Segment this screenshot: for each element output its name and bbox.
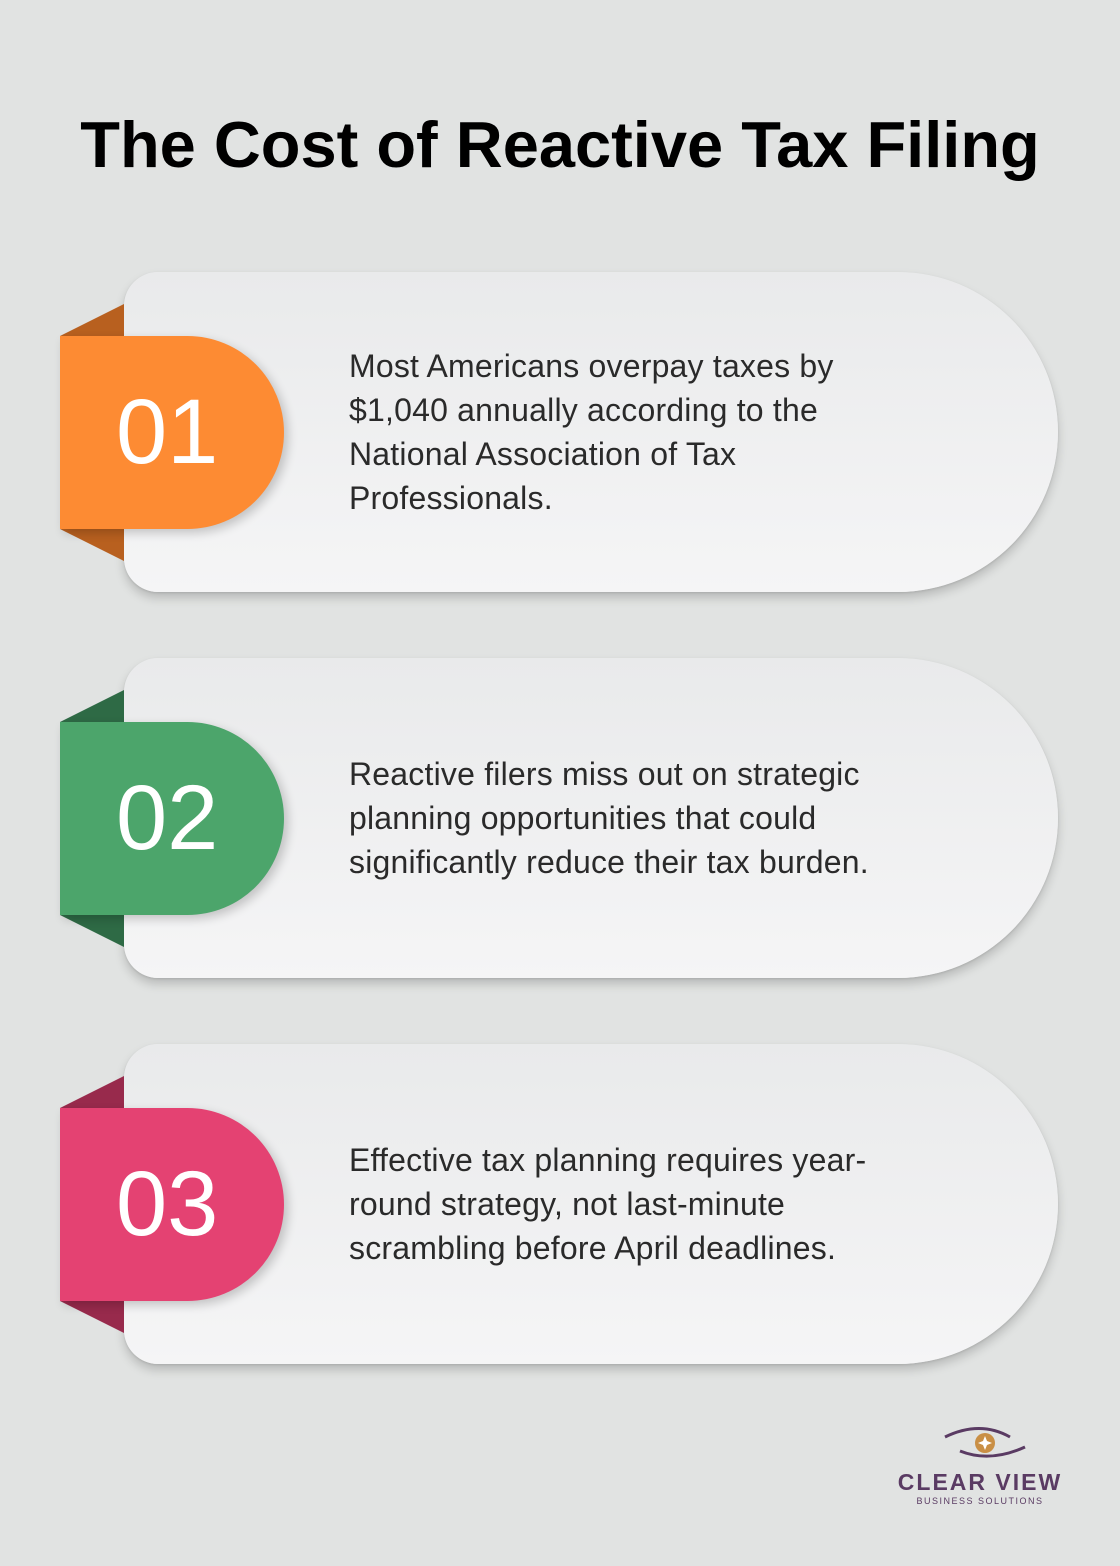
- panel: item 3: [60, 1044, 1062, 1374]
- card 1: [124, 272, 1058, 592]
- card 2: [124, 658, 1058, 978]
- text 2: significantly reduce their tax burden.: [349, 844, 869, 880]
- badge 02: 02: [116, 767, 218, 869]
- text 1: [349, 348, 834, 516]
- fold 2: [60, 690, 124, 947]
- text 1: $1,040 annually according to the: [349, 392, 818, 428]
- badge 01: 01: [116, 381, 218, 483]
- title: The Cost of Reactive Tax Filing: [80, 108, 1040, 181]
- text 1: Professionals.: [349, 480, 553, 516]
- icon: eye: [944, 1427, 1026, 1458]
- text 3: round strategy, not last-minute: [349, 1186, 785, 1222]
- text 1: National Association of Tax: [349, 436, 736, 472]
- text 2: [349, 756, 869, 880]
- card 3: [124, 1044, 1058, 1364]
- text 3: Effective tax planning requires year-: [349, 1142, 866, 1178]
- logo: [898, 1427, 1062, 1506]
- badge 03: 03: [116, 1153, 218, 1255]
- badge 02: [60, 722, 284, 915]
- panel: item 2: [60, 658, 1062, 988]
- badge 03: [60, 1108, 284, 1301]
- text 3: scrambling before April deadlines.: [349, 1230, 836, 1266]
- fold 1: [60, 304, 124, 561]
- fold 3: [60, 1076, 124, 1333]
- text 2: planning opportunities that could: [349, 800, 816, 836]
- badge 01: [60, 336, 284, 529]
- text 1: Most Americans overpay taxes by: [349, 348, 834, 384]
- text 2: Reactive filers miss out on strategic: [349, 756, 860, 792]
- panel: item 1: [60, 272, 1062, 602]
- logo: CLEAR VIEW: [898, 1469, 1062, 1495]
- text 3: [349, 1142, 866, 1266]
- logo: BUSINESS SOLUTIONS: [916, 1496, 1044, 1506]
